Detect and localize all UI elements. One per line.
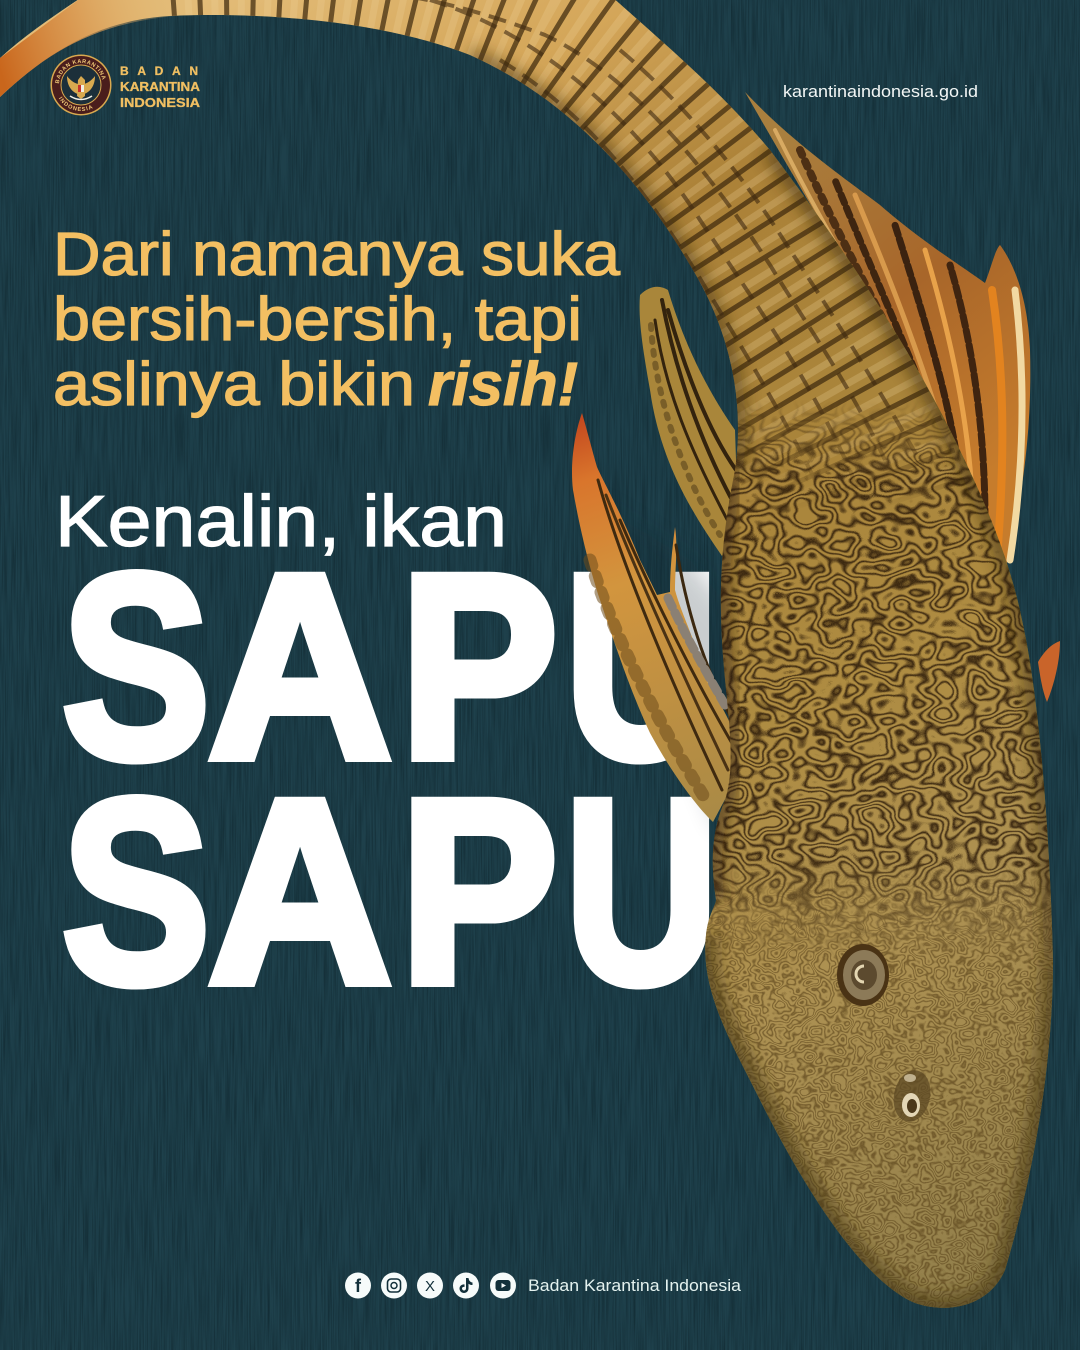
body maze pattern	[690, 400, 1060, 960]
fish nostril	[889, 1067, 935, 1125]
icon: facebook: f	[355, 1276, 362, 1296]
edge shading	[705, 935, 1053, 1308]
logo wordmark: BADAN	[120, 64, 198, 78]
main title: SAPU SAPU: A	[208, 520, 392, 813]
logo emblem: BADAN KARANTINA	[55, 59, 106, 84]
lower pectoral fin	[572, 413, 740, 822]
icon: x	[417, 1272, 443, 1298]
main title: SAPU SAPU: U	[565, 745, 718, 1038]
icon: youtube	[490, 1272, 516, 1298]
logo emblem	[50, 54, 112, 116]
main title: SAPU SAPU: S	[62, 745, 210, 1038]
headline: gold tagline: aslinya bikin	[53, 350, 415, 418]
fish shadow over the lettering	[590, 500, 760, 830]
main title: SAPU SAPU: U	[565, 520, 718, 813]
subheading: Kenalin, ikan: Kenalin, ikan	[55, 482, 507, 562]
icon: facebook	[345, 1272, 371, 1298]
main title: SAPU SAPU	[62, 520, 718, 1038]
headline: gold tagline	[53, 220, 620, 418]
logo wordmark: INDONESIA	[120, 96, 200, 110]
head maze pattern	[705, 865, 1053, 1308]
icon: tiktok	[453, 1272, 479, 1298]
headline: gold tagline: Dari namanya suka	[53, 220, 620, 288]
headline: gold tagline: risih!	[428, 350, 578, 418]
icon: instagram	[381, 1272, 407, 1298]
main title: SAPU SAPU: S	[62, 520, 210, 813]
small right fin	[1038, 641, 1060, 702]
tail tip colouring	[0, 0, 190, 97]
social handle: Badan Karantina Indonesia	[528, 1276, 742, 1295]
upper pectoral fin	[640, 287, 738, 556]
website url: karantinaindonesia.go.id	[783, 83, 978, 101]
social media footer	[345, 1272, 742, 1298]
logo emblem: INDONESIA	[58, 96, 93, 111]
logo wordmark: KARANTINA	[120, 80, 200, 94]
logo wordmark	[120, 64, 200, 110]
headline: gold tagline: bersih-bersih, tapi	[53, 285, 582, 353]
icon: x: X	[425, 1278, 435, 1295]
dorsal fin	[745, 92, 1030, 570]
main title: SAPU SAPU: A	[208, 745, 392, 1038]
main title: SAPU SAPU: P	[400, 520, 558, 813]
logo: Badan Karantina Indonesia	[50, 54, 200, 116]
tail scale bands	[170, 0, 925, 580]
fish eye	[837, 944, 889, 1006]
main title: SAPU SAPU: P	[400, 745, 558, 1038]
